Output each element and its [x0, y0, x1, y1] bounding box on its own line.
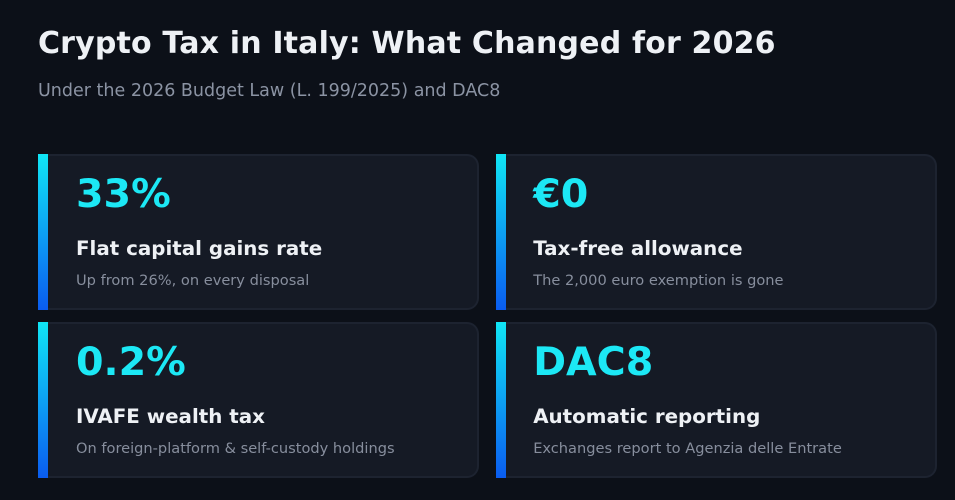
- panel: automatic reporting: [496, 322, 937, 478]
- card description: Exchanges report to Agenzia delle Entrate: [533, 440, 842, 457]
- statistic: DAC8: DAC8: [533, 339, 653, 385]
- card heading: Flat capital gains rate: [76, 237, 322, 260]
- title: Crypto Tax in Italy: What Changed for 2026: [38, 26, 776, 61]
- card background: [38, 322, 479, 478]
- subtitle: Under the 2026 Budget Law (L. 199/2025) and DAC8: [38, 81, 500, 101]
- panel: IVAFE wealth tax: [38, 322, 479, 478]
- statistic: €0: €0: [533, 171, 588, 217]
- card heading: IVAFE wealth tax: [76, 405, 265, 428]
- card description: On foreign-platform & self-custody holdings: [76, 440, 395, 457]
- panel: capital gains rate: [38, 154, 479, 310]
- panel: tax-free allowance: [496, 154, 937, 310]
- card background: [496, 154, 937, 310]
- card heading: Automatic reporting: [533, 405, 760, 428]
- card heading: Tax-free allowance: [533, 237, 743, 260]
- card description: Up from 26%, on every disposal: [76, 272, 309, 289]
- accent bar: [38, 322, 48, 478]
- accent bar: [496, 322, 506, 478]
- statistic: 0.2%: 0.2%: [76, 339, 186, 385]
- accent bar: [38, 154, 48, 310]
- accent bar: [496, 154, 506, 310]
- card description: The 2,000 euro exemption is gone: [533, 272, 784, 289]
- statistic: 33%: 33%: [76, 171, 171, 217]
- card background: [38, 154, 479, 310]
- card background: [496, 322, 937, 478]
